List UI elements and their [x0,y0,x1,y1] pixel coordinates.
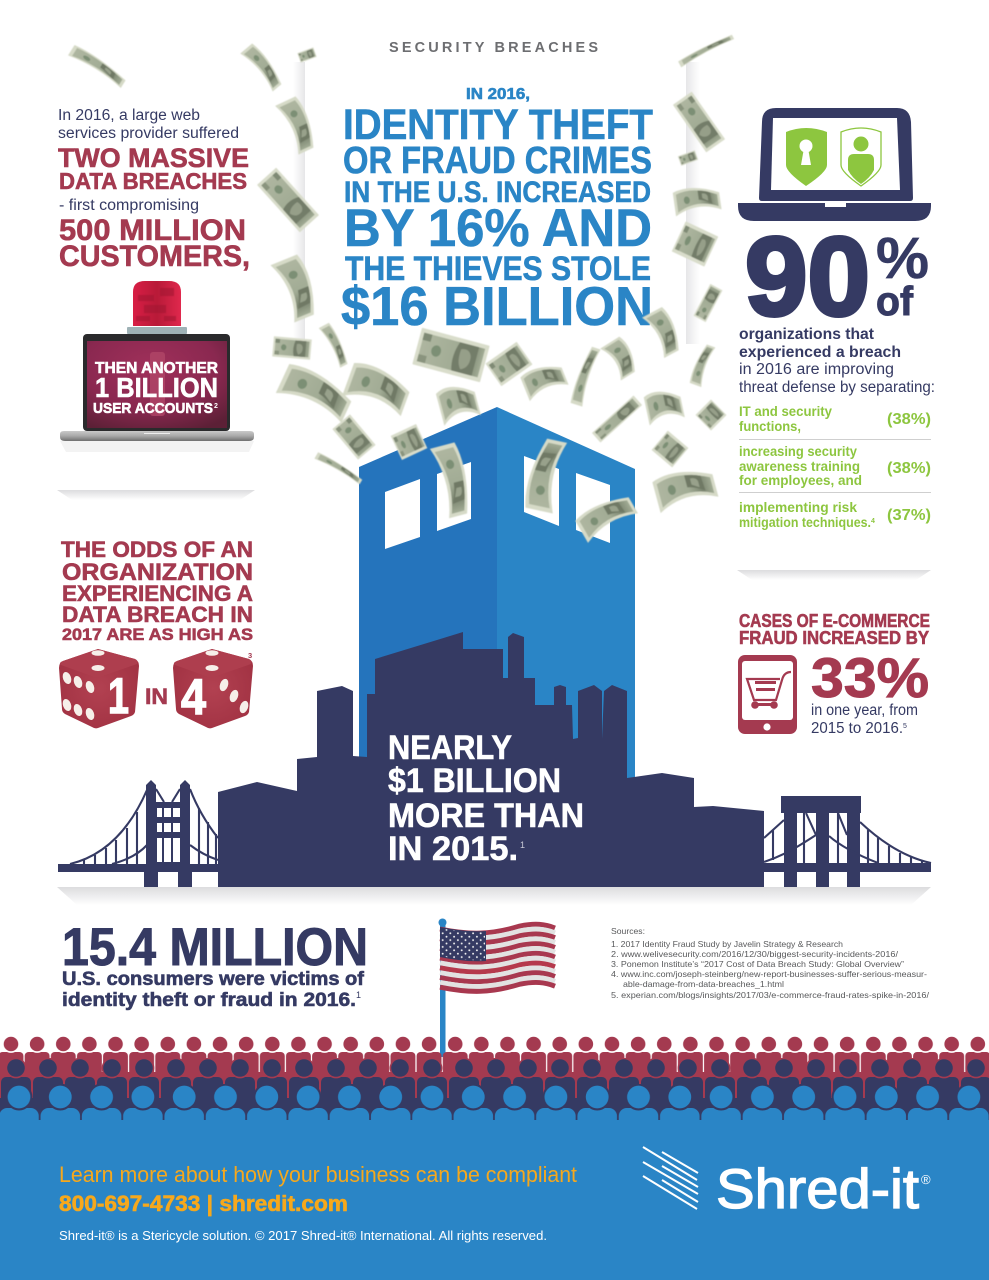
headline: identity theft statistic [341,86,653,337]
list: threat defense measures: (38%) [887,411,931,428]
list: threat defense measures: 4 [871,518,875,525]
statistic: 15.4 million victims: identity theft or fraud in 2016. [62,990,356,1011]
die one: 1 [108,668,129,724]
text block: call to action [59,1162,577,1243]
icon: dice showing 1 in 4 [59,649,253,728]
laptop screen text: 2 [214,403,218,410]
headline: identity theft statistic: IN 2016, [466,86,530,103]
headline: identity theft statistic: THE THIEVES STOLE [345,250,651,288]
text block: sources: able-damage-from-data-breaches_1.html [623,979,784,989]
statistic: 15.4 million victims: 1 [356,990,361,1000]
panel: central headline shadow edges [293,62,700,344]
icon: laptop with security shields [738,108,931,221]
footnote marker: 3 [248,651,252,660]
list: threat defense measures: mitigation techniques. [739,514,871,530]
illustration: blue office tower [359,407,635,780]
statistic: 90 percent of organizations: 90 [745,215,870,339]
list: threat defense measures: increasing security [739,443,857,459]
text block: e-commerce fraud: 2015 to 2016. [811,720,903,737]
text block: nearly 1 billion more: MORE THAN [388,797,584,835]
flag stripes [440,924,555,991]
icon: american flag on pole [438,918,555,1057]
text block: e-commerce fraud: in one year, from [811,702,918,719]
headline: identity theft statistic: IN THE U.S. INCREASED [344,176,651,209]
text block: improving threat defense [739,326,935,396]
text block: two massive data breaches: DATA BREACHES [59,168,247,194]
statistic: 90 percent of organizations [745,215,929,339]
text block: nearly 1 billion more: 1 [520,840,525,850]
text block: improving threat defense: in 2016 are improving [739,361,894,378]
illustration: navy city skyline [218,632,764,887]
flag canton [440,927,486,961]
logo: Shred-it [643,1147,931,1220]
text block: call to action: Shred-it® is a Stericycle solution. © 2017 Shred-it® International. All rights reserved. [59,1228,547,1243]
text block: two massive data breaches: services provider suffered [58,125,239,142]
shield with keyhole [786,128,827,186]
icon: laptop with red alarm beacon [60,281,254,441]
text block: e-commerce fraud [739,611,930,737]
illustration: falling money [68,33,734,543]
list: threat defense measures: (38%) [887,460,931,477]
text block: improving threat defense: threat defense by separating: [739,379,935,396]
text block: e-commerce fraud: 33% [811,646,929,709]
illustration: left suspension bridge [58,780,218,887]
text block: improving threat defense: experienced a breach [739,344,901,361]
die two [173,649,253,728]
text block: two massive data breaches: - first compromising [59,197,199,214]
headline: identity theft statistic: BY 16% AND [344,199,652,258]
text block: odds of a data breach: 2017 ARE AS HIGH AS [62,625,253,644]
text block: two massive data breaches: In 2016, a large web [58,107,200,124]
laptop screen text: THEN ANOTHER [95,360,218,377]
panel: blue footer [0,1120,989,1280]
headline: identity theft statistic: IDENTITY THEFT [343,101,653,149]
text block: odds of a data breach: DATA BREACH IN [62,602,253,627]
list: threat defense measures: IT and security [739,403,832,419]
laptop screen text [93,360,218,417]
icon: tablet with shopping cart [738,655,797,734]
text block: two massive data breaches: 500 MILLION [59,214,246,247]
text block: odds of a data breach: ORGANIZATION [62,559,253,586]
list: threat defense measures: implementing risk [739,499,857,515]
text block: e-commerce fraud: 5 [903,723,907,730]
die one [59,649,139,728]
text block: two massive data breaches: CUSTOMERS, [59,240,250,273]
text block: call to action: Learn more about how your business can be compliant [59,1162,577,1187]
text block: nearly 1 billion more: $1 BILLION [388,762,561,800]
shield with person [841,128,881,186]
panel: left column divider shadows [57,441,255,500]
list: threat defense measures: (37%) [887,507,931,524]
panel: right column divider shadow [737,570,931,580]
text block: two massive data breaches [58,107,250,273]
text block: e-commerce fraud: FRAUD INCREASED BY [739,628,929,648]
text block: nearly 1 billion more [388,729,584,868]
statistic: 90 percent of organizations: of [876,278,913,324]
text block: e-commerce fraud: CASES OF E-COMMERCE [739,611,930,631]
list: threat defense measures: functions, [739,418,801,434]
text block: odds of a data breach: EXPERIENCING A [62,581,253,606]
text block: sources: 1. 2017 Identity Fraud Study by Javelin Strategy & Research [611,939,843,949]
statistic: 90 percent of organizations: % [876,226,929,291]
word: in: IN [145,684,168,709]
heading: section label: SECURITY BREACHES [389,40,598,56]
illustration: right suspension bridge [764,796,931,887]
text block: nearly 1 billion more: NEARLY [388,729,512,767]
text block: sources: Sources: [611,926,645,936]
list: threat defense measures: for employees, and [739,472,862,488]
text block: sources: 2. www.welivesecurity.com/2016/12/30/biggest-security-incidents-2016/ [611,949,899,959]
text block: sources: 3. Ponemon Institute’s “2017 Cost of Data Breach Study: Global Overview” [611,959,904,969]
list: threat defense measures: awareness training [739,458,860,474]
headline: identity theft statistic: OR FRAUD CRIMES [343,140,652,182]
text block: odds of a data breach: THE ODDS OF AN [61,537,253,562]
statistic: 15.4 million victims: U.S. consumers were victims of [62,969,365,990]
logo: Shred-it: ® [921,1172,931,1187]
statistic: 15.4 million victims [62,918,368,1011]
text block: sources [611,926,930,1000]
statistic: 15.4 million victims: 15.4 MILLION [62,918,368,977]
text block: call to action: 800-697-4733 | shredit.com [59,1191,348,1216]
text block: odds of a data breach [61,537,253,644]
illustration: crowd of people [0,1034,989,1124]
headline: identity theft statistic: $16 BILLION [341,275,653,337]
die two: 4 [181,669,206,725]
laptop screen text: USER ACCOUNTS [93,400,213,417]
text block: sources: 4. www.inc.com/joseph-steinberg/new-report-businesses-suffer-serious-measur- [611,969,927,979]
logo: Shred-it: Shred-it [716,1157,919,1220]
text block: improving threat defense: organizations that [739,326,875,343]
text block: two massive data breaches: TWO MASSIVE [58,143,249,173]
laptop screen text: 1 BILLION [95,372,218,403]
list: threat defense measures [739,403,931,530]
panel: city ground shadow [57,887,931,905]
text block: nearly 1 billion more: IN 2015. [388,830,518,868]
text block: sources: 5. experian.com/blogs/insights/2017/03/e-commerce-fraud-rates-spike-in-2016/ [611,990,930,1000]
